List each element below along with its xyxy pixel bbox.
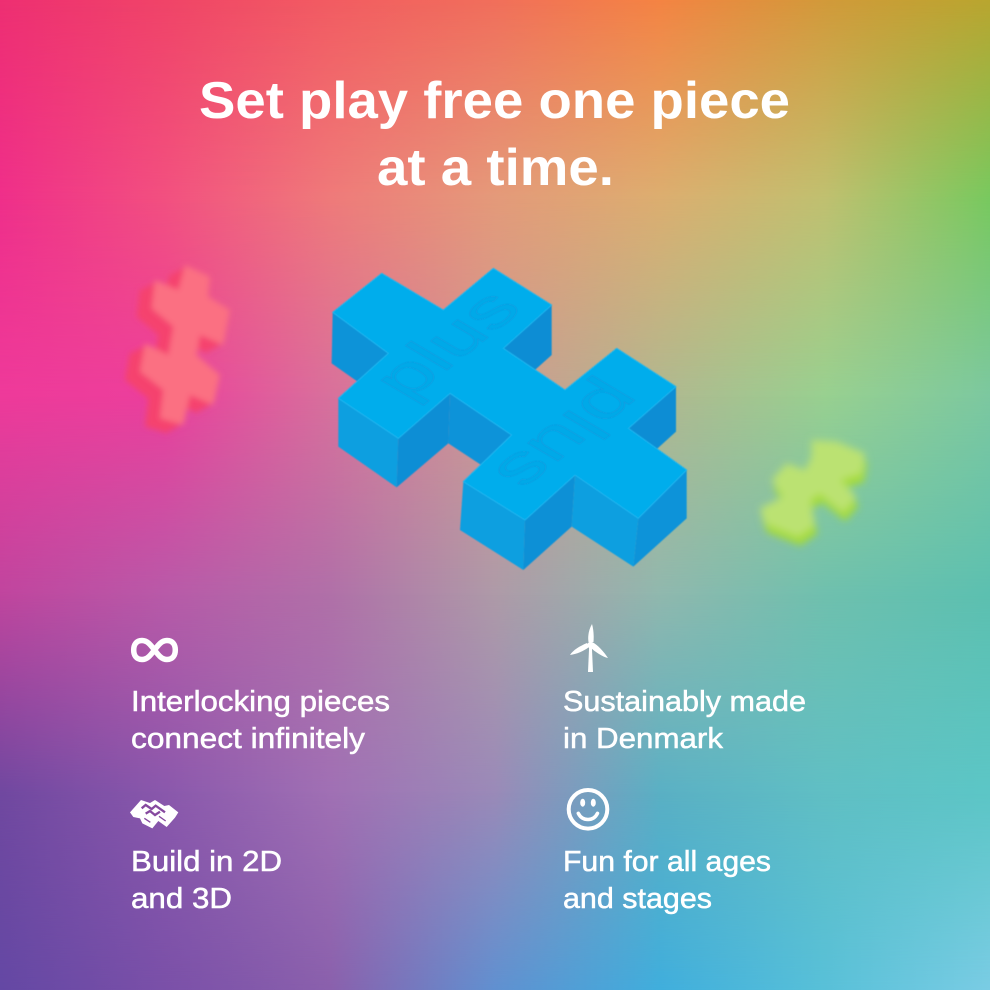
embossed text: plus upside down: plus <box>479 372 660 503</box>
text: fun: Fun for all ages <box>563 846 771 878</box>
text: sustainably: in Denmark <box>563 723 724 755</box>
title: at a time. <box>377 139 614 197</box>
feature: fun for all ages <box>563 790 771 915</box>
text: fun: and stages <box>563 883 712 915</box>
title: Set play free one piece <box>199 72 790 130</box>
icon: infinity <box>134 640 175 660</box>
feature: build in 2D and 3D <box>130 800 282 915</box>
text: interlocking <box>131 686 390 755</box>
text: fun <box>563 846 771 915</box>
feature: sustainably made <box>563 624 806 755</box>
icon: building blocks <box>130 800 178 828</box>
embossed text: plus: plus <box>356 278 536 409</box>
title <box>199 72 790 197</box>
text: build: Build in 2D <box>131 846 282 878</box>
piece side faces <box>332 305 687 570</box>
blurred green puzzle piece <box>760 440 867 545</box>
feature: interlocking pieces <box>131 640 390 755</box>
text: interlocking: Interlocking pieces <box>131 686 390 718</box>
piece top face <box>333 268 687 520</box>
text: build: and 3D <box>131 883 232 915</box>
text: sustainably: Sustainably made <box>563 686 806 718</box>
icon: smiley <box>569 790 607 829</box>
main blue puzzle piece <box>332 268 687 570</box>
text: build <box>131 846 282 915</box>
icon: wind turbine <box>570 624 608 672</box>
blurred pink puzzle piece <box>125 265 230 433</box>
text: sustainably <box>563 686 806 755</box>
text: interlocking: connect infinitely <box>131 723 366 755</box>
